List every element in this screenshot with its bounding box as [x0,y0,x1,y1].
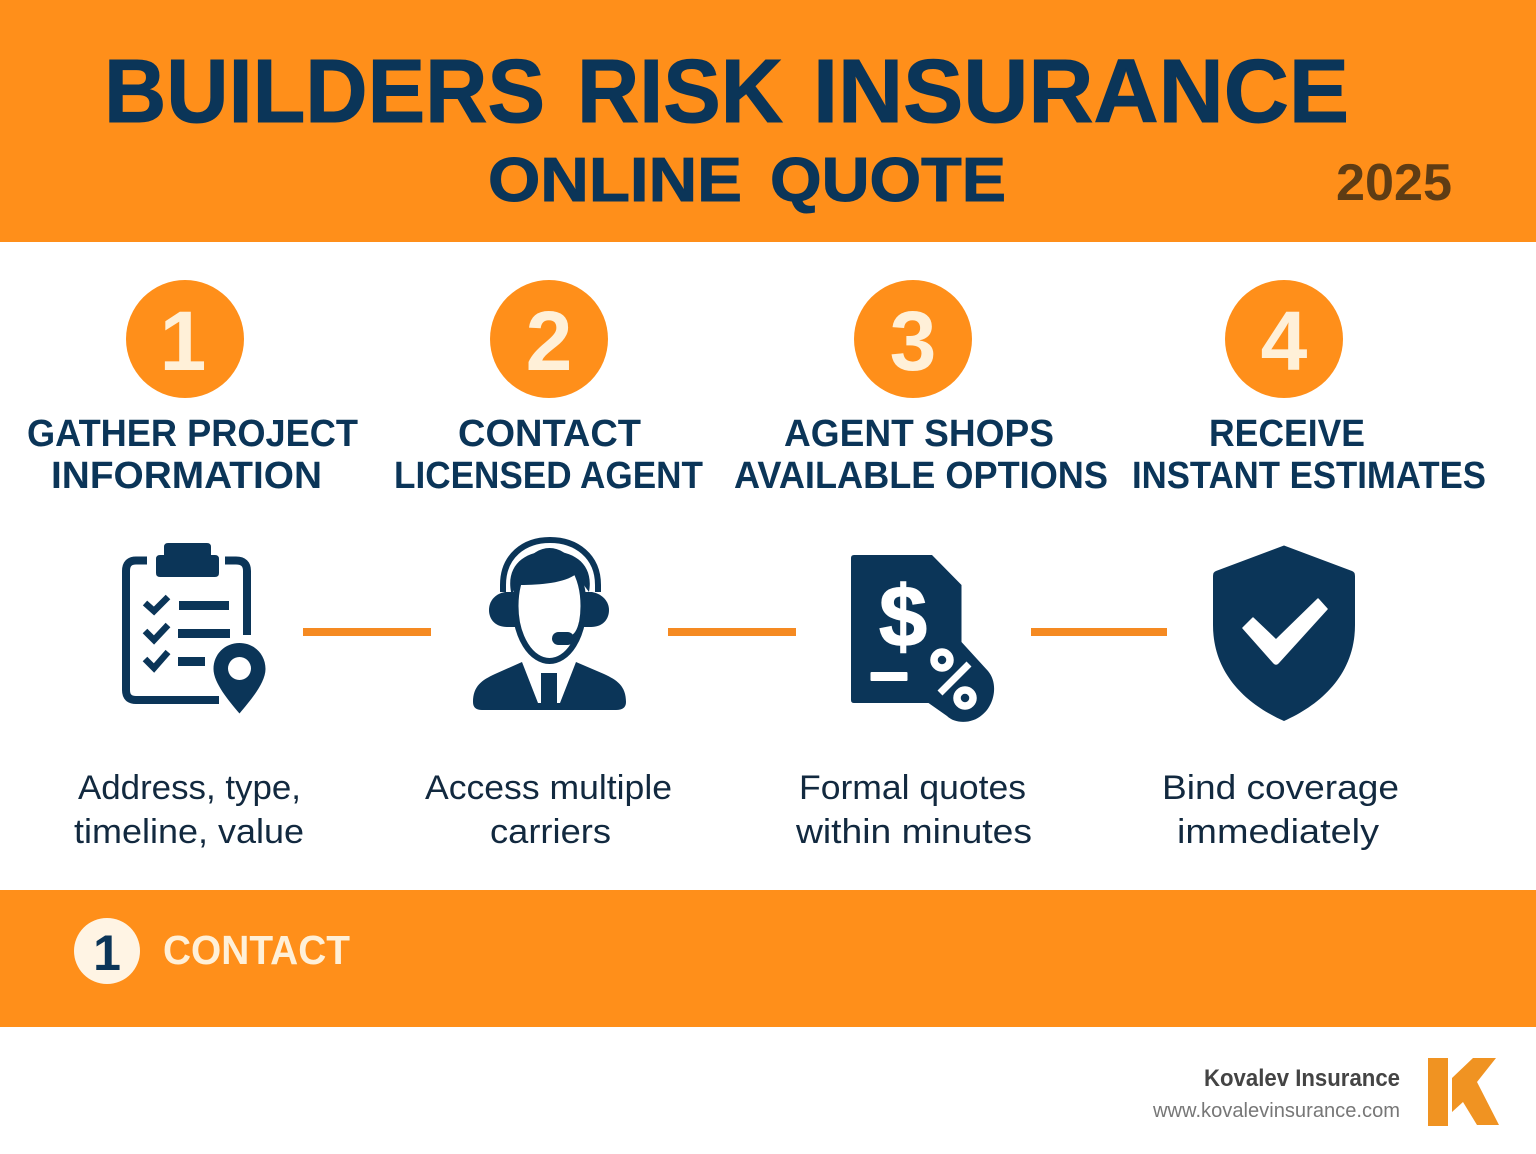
step 4 heading [1132,413,1486,497]
step 2 description: carriers [490,813,611,851]
step 2 number badge: 2 [526,294,572,388]
step 4 number badge: 4 [1261,294,1308,388]
icon: shield with check mark [1213,546,1355,721]
step 3 description: within minutes [795,813,1032,851]
title: BUILDERS [104,42,545,142]
year: 2025 [1336,154,1452,212]
footer brand text: Kovalev Insurance [1204,1065,1400,1092]
contact number badge: 1 [93,925,121,981]
title [104,42,1349,142]
step 3 heading [734,413,1108,497]
logo: K mark [1428,1058,1499,1126]
contact banner [0,890,1536,1027]
step 2 heading: LICENSED AGENT [394,455,703,497]
step 1 description [74,769,304,851]
connector 1 to 2 [303,628,431,636]
icon: quote document with dollar and percent [851,555,994,722]
step 2 number badge [490,280,608,398]
step 1 heading: INFORMATION [51,455,322,497]
step 2 heading: CONTACT [458,413,641,455]
step 4 number badge [1225,280,1343,398]
step 1 number badge [126,280,244,398]
step 2 heading [394,413,703,497]
title: INSURANCE [813,42,1349,142]
icon: agent with headset [473,540,626,710]
icon: quote document with dollar and percent: $ [879,569,927,665]
step 3 column [734,280,1108,851]
step 1 description: Address, type, [78,769,301,807]
step 3 description: Formal quotes [799,769,1026,807]
title: RISK [577,42,783,142]
contact label: CONTACT [163,927,350,973]
step 4 description [1162,769,1399,851]
step 3 number badge [854,280,972,398]
step 3 description [795,769,1032,851]
icon: clipboard with checklist and location pin [126,543,266,714]
subtitle: ONLINE [488,146,742,215]
footer brand text: www.kovalevinsurance.com [1152,1100,1400,1122]
contact number badge [74,918,140,984]
step 3 heading: AVAILABLE OPTIONS [734,455,1108,497]
step 1 heading: GATHER PROJECT [27,413,358,455]
step 3 number badge: 3 [890,294,936,388]
step 3 heading: AGENT SHOPS [784,413,1054,455]
step 1 column [27,280,358,851]
connector 2 to 3 [668,628,796,636]
step 1 number badge: 1 [160,294,206,388]
step 4 description: Bind coverage [1162,769,1399,807]
step 2 column [394,280,703,851]
step 4 description: immediately [1177,813,1379,851]
connector 3 to 4 [1031,628,1167,636]
step 4 heading: RECEIVE [1209,413,1365,455]
header banner [0,0,1536,242]
step 2 description: Access multiple [425,769,672,807]
footer brand text [1152,1065,1400,1122]
step 1 heading [27,413,358,497]
step 4 column [1132,280,1486,851]
step 2 description [425,769,672,851]
subtitle: QUOTE [770,146,1006,215]
step 4 heading: INSTANT ESTIMATES [1132,455,1486,497]
step 1 description: timeline, value [74,813,304,851]
subtitle [488,146,1006,215]
